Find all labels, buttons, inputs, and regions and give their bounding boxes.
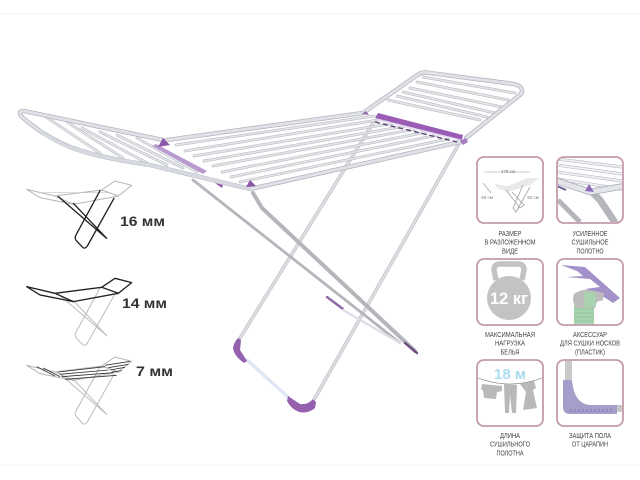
icon: purple foot cap — [563, 361, 623, 414]
reinforced frame — [557, 157, 623, 223]
icon: hand and sleeve — [573, 290, 604, 324]
size caption: ВИДЕ — [502, 248, 518, 255]
floor frame — [557, 360, 623, 426]
size diagram — [481, 169, 539, 212]
accessory caption: (ПЛАСТИК) — [575, 349, 605, 356]
length caption — [490, 433, 530, 457]
size caption: РАЗМЕР — [498, 231, 522, 238]
icon: kettlebell: 12 кг — [490, 290, 528, 308]
label: 14 mm: 14 мм — [122, 295, 167, 311]
accessory caption: АКСЕССУАР — [573, 332, 607, 339]
panel: maximum load — [477, 259, 543, 356]
panel: sock accessory — [557, 259, 623, 356]
label: 16 mm: 16 мм — [120, 213, 165, 229]
size diagram: 93 см — [481, 195, 493, 200]
panel: reinforced surface — [557, 157, 625, 255]
purple hinges — [152, 111, 468, 188]
length caption: СУШИЛЬНОГО — [490, 442, 530, 449]
panel: line length — [477, 360, 543, 457]
rack feet — [233, 338, 316, 412]
size caption — [484, 231, 536, 255]
rack legs — [193, 123, 460, 398]
reinforced caption: УСИЛЕННОЕ — [572, 231, 608, 238]
load frame — [477, 259, 543, 325]
length frame — [477, 360, 543, 426]
reinforced caption: ПОЛОТНО — [576, 248, 604, 255]
icon: clothes line — [478, 378, 542, 413]
drying slats — [43, 77, 515, 182]
reinforced rail detail — [557, 159, 625, 224]
icon: sock holder comb — [561, 265, 620, 303]
size diagram: 92 см — [527, 195, 539, 200]
rack frame rails — [20, 72, 522, 189]
small rack: 14 mm — [27, 278, 132, 345]
load caption: НАГРУЗКА — [495, 341, 525, 348]
accessory frame — [557, 259, 623, 325]
size diagram: 178 см — [501, 169, 515, 174]
main drying rack — [20, 72, 522, 412]
small rack: 16 mm — [27, 181, 132, 248]
floor caption — [569, 433, 611, 449]
size caption: В РАЗЛОЖЕННОМ — [484, 240, 536, 247]
size frame — [477, 157, 543, 223]
length caption: ДЛИНА — [500, 433, 520, 440]
floor caption: ЗАЩИТА ПОЛА — [569, 433, 611, 440]
reinforced caption: СУШИЛЬНОЕ — [572, 240, 609, 247]
reinforced caption — [572, 231, 609, 255]
accessory caption — [560, 332, 620, 356]
panel: size — [477, 157, 543, 255]
load caption: МАКСИМАЛЬНАЯ — [485, 332, 535, 339]
length caption: ПОЛОТНА — [496, 450, 524, 457]
load caption — [485, 332, 535, 356]
panel: floor protection — [557, 360, 623, 449]
small rack: 7 mm — [27, 357, 132, 424]
label: 18 m: 18 м — [494, 366, 526, 383]
accessory caption: ДЛЯ СУШКИ НОСКОВ — [560, 341, 620, 348]
load caption: БЕЛЬЯ — [500, 349, 520, 356]
floor caption: ОТ ЦАРАПИН — [572, 442, 608, 449]
label: 7 mm: 7 мм — [136, 363, 173, 379]
